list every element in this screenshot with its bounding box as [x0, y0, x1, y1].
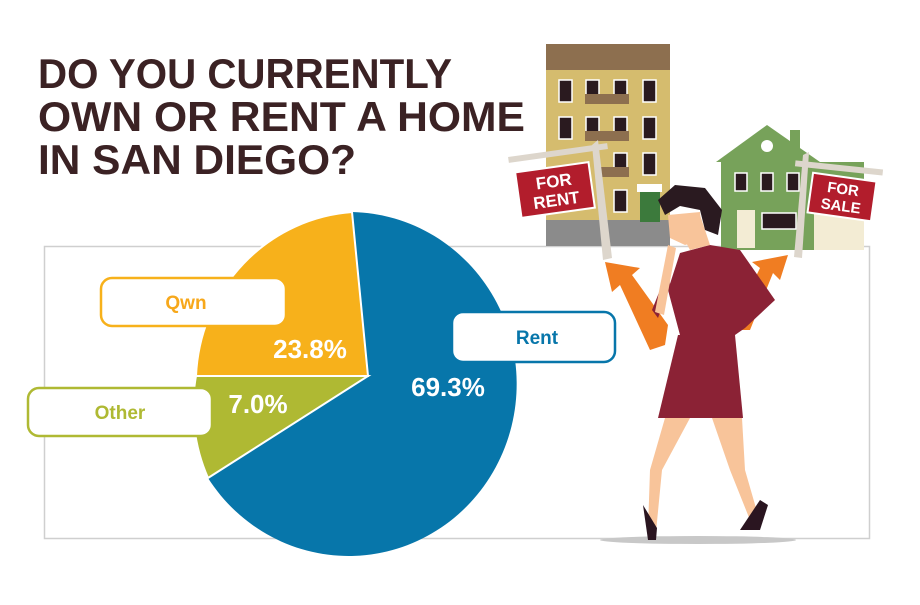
slice: own — [196, 212, 368, 376]
value: rent: 69.3% — [411, 372, 485, 402]
sign: for sale: SALE — [820, 195, 862, 218]
label: own: Qwn — [165, 293, 207, 314]
pie chart — [193, 212, 517, 556]
chart frame — [44, 246, 870, 538]
label: other — [28, 388, 212, 436]
title: DO YOU CURRENTLY — [38, 50, 452, 97]
label: other: Other — [95, 403, 146, 424]
sign: for rent: RENT — [532, 188, 581, 213]
illustration: green house — [716, 125, 864, 250]
icon: orange arrows — [605, 255, 788, 350]
sign: for rent: FOR — [535, 170, 573, 193]
label: rent — [452, 312, 615, 362]
sign: for rent — [508, 140, 612, 260]
illustration: woman — [600, 185, 796, 544]
title: OWN OR RENT A HOME — [38, 93, 525, 140]
label: rent: Rent — [516, 328, 559, 349]
title — [38, 50, 525, 183]
illustration: apartment building — [546, 44, 670, 246]
value: own: 23.8% — [273, 334, 347, 364]
label: own — [101, 278, 286, 326]
slice: rent — [208, 212, 517, 556]
sign: for sale — [794, 152, 883, 258]
title: IN SAN DIEGO? — [38, 136, 356, 183]
sign: for sale: FOR — [826, 179, 860, 200]
value: other: 7.0% — [228, 389, 288, 419]
slice: other — [193, 376, 368, 478]
